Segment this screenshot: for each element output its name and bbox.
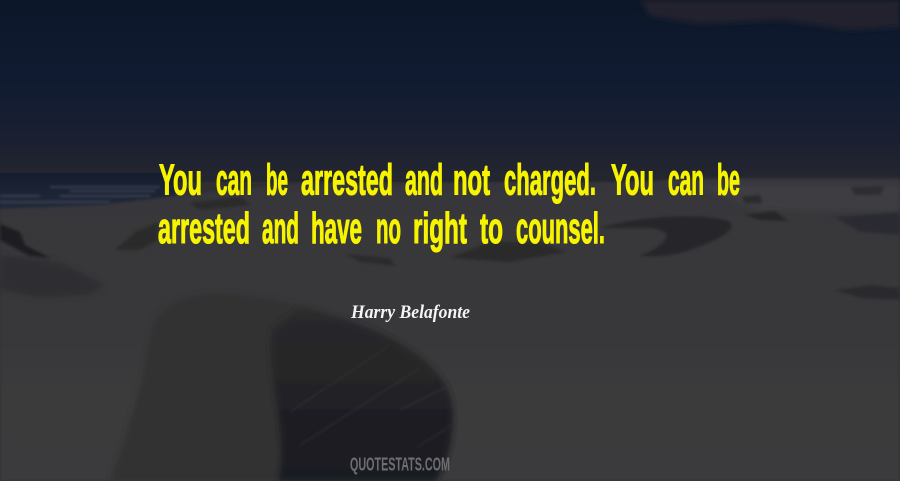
quote line 1: arrested <box>301 156 393 204</box>
quote text: counsel. <box>516 204 605 253</box>
background: night sky <box>0 0 900 182</box>
quote line 2 <box>158 204 605 253</box>
foreground dune <box>110 293 453 481</box>
quote text <box>158 156 740 253</box>
background: sea <box>0 173 175 209</box>
quote line 2: right <box>413 204 467 253</box>
quote line 2: arrested <box>158 204 250 253</box>
quote line 1: and <box>405 156 443 204</box>
quote line 2: have <box>311 204 362 253</box>
quote line 1: can <box>216 156 252 204</box>
quote line 2: to <box>480 204 503 253</box>
quote line 1: not <box>453 156 490 204</box>
infographic canvas: be <box>717 156 740 204</box>
background: sand dunes <box>0 178 900 481</box>
vegetation and shadows <box>0 186 900 300</box>
quote line 1: You <box>159 156 202 204</box>
quote line 2: and <box>262 204 299 253</box>
quote line 1: You <box>611 156 654 204</box>
author name: Harry Belafonte <box>350 302 471 323</box>
quote line 1 <box>159 156 740 204</box>
quote line 2: no <box>376 204 401 253</box>
quote line 1: charged. <box>504 156 596 204</box>
dark dune hollow <box>600 216 732 256</box>
quote line 1: be <box>266 156 288 204</box>
watermark: QUOTESTATS.COM <box>350 454 450 474</box>
quote line 1: can <box>668 156 704 204</box>
